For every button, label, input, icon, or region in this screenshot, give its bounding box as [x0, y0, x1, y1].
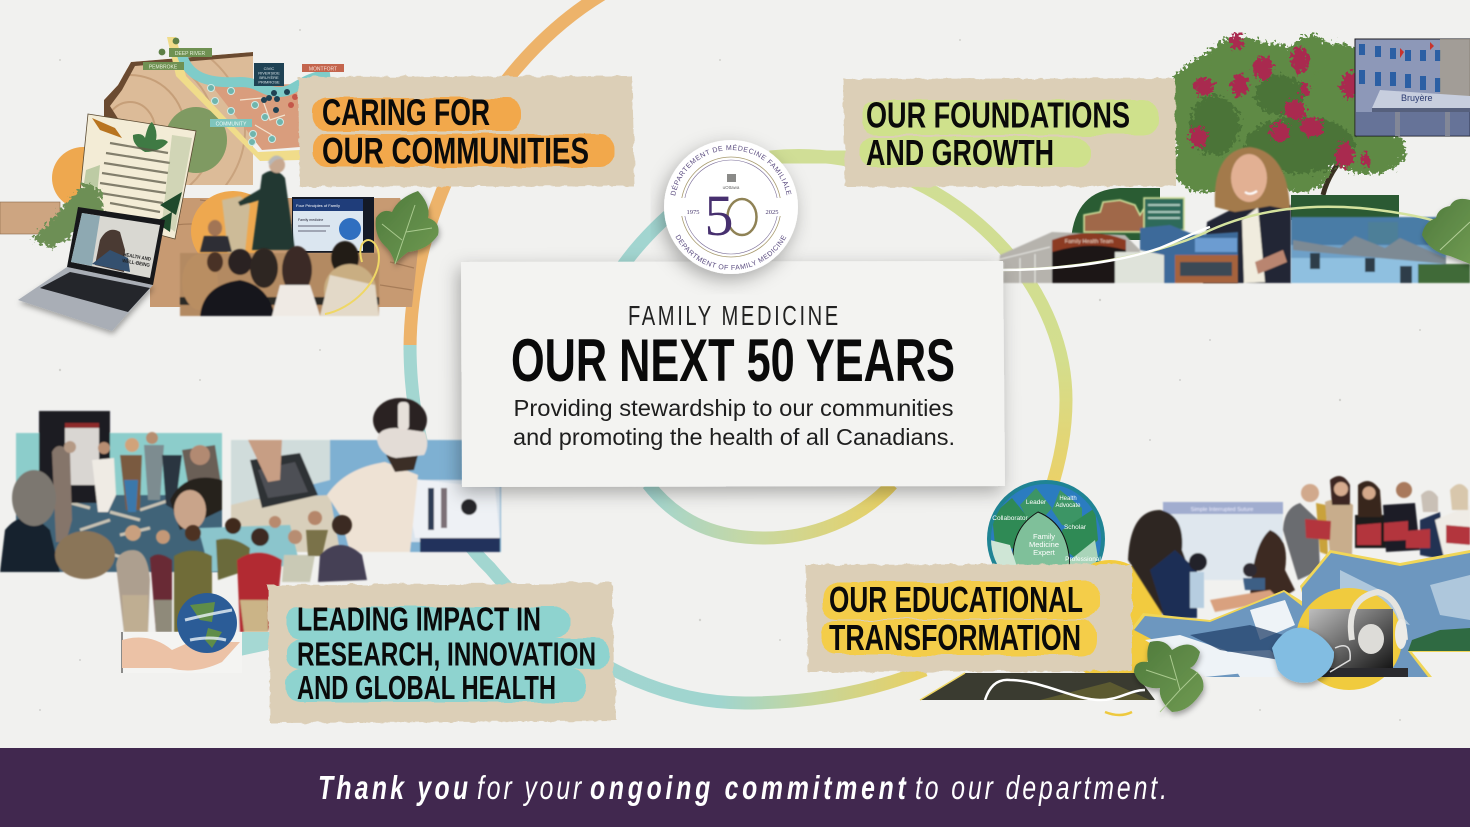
heading: AND GLOBAL HEALTH [297, 669, 556, 706]
label highlight orange [312, 98, 614, 167]
snowy mountains [1132, 550, 1470, 677]
laptop: HEALTH AND [123, 252, 152, 263]
Bruyere building photo [1355, 39, 1470, 136]
hospital buildings [997, 198, 1238, 283]
competency circle: Health [1059, 496, 1077, 502]
collage: caring for our communities [0, 30, 439, 331]
green white wave line [1000, 207, 1450, 270]
competency circle: Family [1033, 532, 1055, 541]
heading: RESEARCH, INNOVATION [297, 636, 596, 672]
map label hospitals: PRIMROSE [258, 80, 280, 84]
collage: foundations and growth [997, 34, 1470, 283]
leaf [376, 191, 439, 264]
heading: OUR FOUNDATIONS [866, 94, 1130, 136]
globe in hand with teal splash [122, 593, 270, 673]
land acknowledgement paper [78, 114, 196, 239]
map label hospitals: RIVERSIDE [258, 70, 280, 76]
decorative spiral ring [410, 0, 1066, 703]
map markers [208, 84, 284, 146]
competency circle: Medicine [1029, 540, 1059, 549]
orange circle left [52, 147, 114, 209]
label highlight green [861, 100, 1157, 167]
heading: AND GROWTH [866, 132, 1054, 173]
paper flecks [39, 29, 1421, 721]
title text: FAMILY MEDICINE [628, 301, 838, 332]
50th anniversary logo: 1975 [686, 209, 700, 216]
wood panel lower [0, 198, 418, 307]
group standing photo [116, 511, 367, 632]
50th anniversary logo [651, 136, 805, 290]
presentation screen [292, 197, 374, 253]
dark mountain strip [920, 673, 1155, 700]
classroom photo [1128, 502, 1295, 618]
heading [297, 600, 596, 706]
laptop [18, 207, 165, 331]
heading: OUR COMMUNITIES [322, 130, 589, 172]
white and yellow squiggle [985, 680, 1145, 700]
speaker at podium [200, 156, 295, 253]
heading: CARING FOR [322, 92, 490, 133]
label highlight teal [286, 607, 610, 702]
thank you message: for your [477, 771, 582, 807]
map label community: COMMUNITY [216, 122, 247, 128]
laptop: WELL-BEING [122, 258, 150, 269]
yellow circle with laptop headphones and mask [1272, 588, 1408, 690]
yellow squiggle [325, 240, 379, 314]
competency circle [987, 480, 1105, 566]
orange circle behind podium [191, 191, 275, 271]
footer banner [0, 748, 1470, 827]
green blob [165, 107, 227, 173]
wood disc [104, 52, 253, 185]
bridge photo [1291, 217, 1470, 283]
thank you message: ongoing commitment [590, 771, 907, 807]
50th anniversary logo: DÉPARTEMENT DE MÉDECINE FAMILIALE [670, 144, 792, 196]
map label hospitals: BRUYÈRE [259, 75, 279, 80]
collage: research innovation and global health [0, 398, 501, 673]
thank you message: to our department. [915, 771, 1167, 807]
competency circle: Professional [1065, 556, 1101, 563]
dark green backdrop [1071, 188, 1399, 240]
thank you message [318, 771, 1167, 807]
fern [32, 182, 105, 248]
panel: our foundations and growth [843, 78, 1176, 187]
map label montfort: MONTFORT [309, 66, 337, 72]
heading [829, 579, 1083, 658]
heading: OUR EDUCATIONAL [829, 579, 1083, 620]
map label pembroke [143, 62, 184, 70]
title text [511, 301, 955, 450]
competency circle: Leader [1026, 499, 1047, 506]
thank you message: Thank you [318, 771, 468, 807]
map label hospitals: CIVIC [264, 66, 274, 71]
map label pembroke: PEMBROKE [149, 64, 178, 70]
yellow circle behind panel [1058, 560, 1162, 680]
title text: and promoting the health of all Canadians. [513, 424, 955, 450]
heading [866, 94, 1130, 173]
competency circle: Scholar [1064, 524, 1087, 531]
map label deep river [169, 48, 212, 57]
heading [322, 92, 589, 172]
VR photo [231, 398, 501, 552]
competency circle: Collaborator [992, 515, 1029, 522]
classroom photo: Simple Interrupted Suture [1191, 507, 1253, 513]
label highlight yellow [821, 582, 1100, 655]
hospital buildings: Family Health Team [1065, 239, 1114, 245]
competency circle: Expert [1033, 548, 1056, 557]
presentation screen: Family medicine [298, 218, 323, 222]
central title panel [461, 261, 1005, 487]
50th anniversary logo: 5 [704, 183, 734, 248]
title text: OUR NEXT 50 YEARS [511, 327, 955, 394]
competency circle: Advocate [1055, 503, 1081, 509]
tree [1163, 34, 1406, 195]
panel: our educational transformation [806, 564, 1132, 672]
50th anniversary logo: 2025 [766, 209, 778, 216]
poster group photo [0, 411, 222, 579]
presentation screen: Four Principles of Family [296, 203, 340, 208]
map label montfort [302, 64, 344, 72]
panel: leading impact [268, 583, 616, 723]
leaf [1422, 199, 1470, 264]
community map [143, 37, 344, 161]
heading: LEADING IMPACT IN [297, 600, 541, 638]
leaf [1134, 641, 1203, 712]
map label hospitals [254, 63, 284, 86]
graduates photo [1283, 476, 1470, 580]
collage: educational transformation [920, 476, 1470, 715]
title text: Providing stewardship to our communities [514, 395, 954, 421]
portrait of woman [1203, 147, 1291, 283]
map label community [210, 119, 252, 128]
map label deep river: DEEP RIVER [175, 51, 205, 57]
50th anniversary logo: DEPARTMENT OF FAMILY MEDICINE [676, 234, 786, 270]
Bruyere building photo: Bruyère [1401, 93, 1433, 103]
heading: TRANSFORMATION [829, 617, 1081, 658]
audience photo [180, 241, 379, 316]
panel: caring for our communities [298, 76, 635, 187]
50th anniversary logo: uOttawa [723, 185, 740, 190]
